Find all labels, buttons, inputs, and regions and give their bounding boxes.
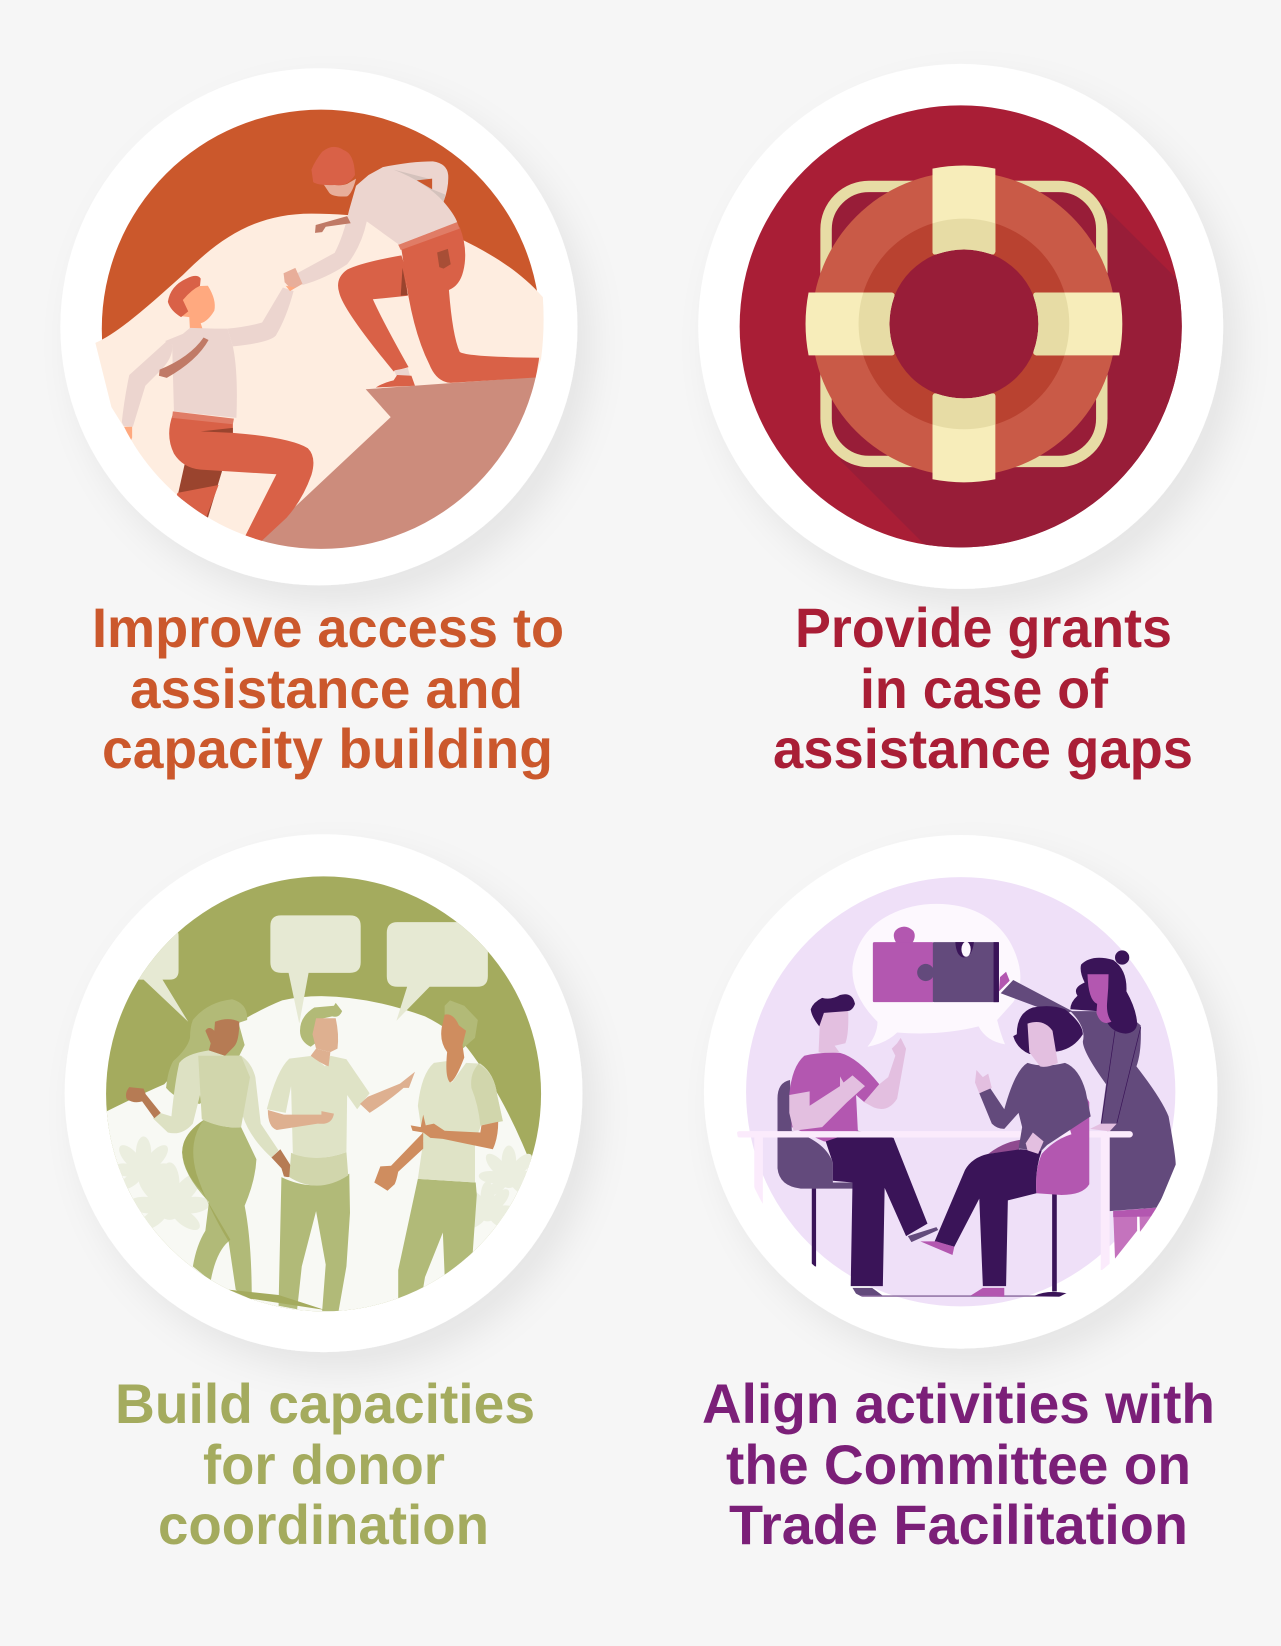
white disc [698, 64, 1223, 589]
heading: align activities: Trade Facilitation [729, 1493, 1188, 1556]
heading: improve access: Improve access to [92, 596, 564, 659]
heading: provide grants: Provide grants [795, 596, 1172, 659]
puzzle magenta piece [873, 942, 934, 1002]
right chair leg [1052, 1193, 1057, 1291]
right chair [1036, 1091, 1089, 1195]
lower man hand [286, 286, 295, 291]
upper man hand [284, 268, 302, 290]
man raised arm [864, 1038, 906, 1109]
lower man hair [168, 276, 201, 317]
hair bun [1115, 950, 1129, 965]
rock [258, 377, 547, 557]
heading: improve access [92, 596, 564, 780]
puzzle notch light [961, 942, 971, 957]
top band [932, 166, 995, 255]
lower man back arm [121, 341, 172, 427]
woman right hand [271, 1149, 295, 1177]
seated woman pants [935, 1149, 1042, 1286]
heading: improve access: assistance and [130, 657, 523, 720]
right man hair [445, 1000, 478, 1050]
speech bubble [852, 904, 1020, 1047]
white disc [704, 835, 1217, 1349]
upper man tie [315, 216, 351, 233]
sleeve line [1101, 1027, 1141, 1124]
upper man shirt [297, 161, 457, 285]
middle man face [312, 1018, 338, 1052]
middle man pointing arm [360, 1072, 415, 1113]
left chair leg [812, 1189, 816, 1266]
standing woman table hand [1090, 1124, 1117, 1131]
left band [806, 292, 895, 355]
bottom band [932, 393, 995, 482]
ground strip [229, 1290, 325, 1310]
legging strip [1113, 1207, 1158, 1217]
lower man rear leg [177, 464, 222, 518]
left speech bubble [138, 932, 188, 1022]
heading: donor coordination: Build capacities [115, 1372, 535, 1435]
lower man torso [165, 328, 237, 418]
right chair base [1035, 1292, 1067, 1297]
orange sky [102, 110, 540, 548]
puzzle edge [994, 942, 999, 1002]
standing woman face [1087, 974, 1111, 1023]
standing woman raised arm [1001, 980, 1072, 1018]
belt [398, 222, 460, 250]
heading: provide grants: in case of [860, 657, 1108, 720]
lower man lower hand [124, 426, 132, 440]
heading: provide grants [773, 596, 1193, 780]
man planted shoe [852, 1288, 883, 1297]
seated woman belly hand [1026, 1132, 1044, 1154]
leaves left [118, 1136, 209, 1230]
table top [736, 1131, 1133, 1137]
heading: donor coordination [115, 1372, 535, 1556]
seated woman top [979, 1063, 1091, 1150]
heading: align activities [702, 1372, 1215, 1556]
heading: align activities: the Committee on [726, 1433, 1191, 1496]
arm gap [417, 179, 432, 189]
trouser shadow [401, 268, 408, 296]
white disc [65, 834, 582, 1352]
upper man face [322, 178, 356, 197]
upper man hair [311, 147, 355, 185]
trouser crease [201, 428, 233, 433]
man trousers [826, 1131, 927, 1286]
middle man shirt [267, 1056, 370, 1158]
standing woman hand [999, 972, 1010, 991]
upper man rear leg [401, 227, 547, 383]
middle man shirt hem [289, 1152, 348, 1186]
right man face [441, 1014, 466, 1082]
middle man hair [300, 1003, 342, 1047]
table right leg [1101, 1137, 1110, 1270]
seated woman planted shoe [970, 1288, 1004, 1297]
heading: improve access: capacity building [102, 717, 553, 780]
lower man raised arm [227, 287, 294, 346]
pocket [437, 249, 451, 269]
long shadow [841, 204, 1187, 557]
panel: provide grants [698, 64, 1223, 589]
heading: provide grants: assistance gaps [773, 717, 1193, 780]
middle man neck [311, 1049, 330, 1066]
puzzle knob top [894, 927, 915, 943]
man face and neck [819, 1011, 848, 1054]
red disc [740, 105, 1182, 547]
scene [100, 915, 550, 1320]
man shirt [789, 1053, 879, 1143]
middle man trousers [279, 1174, 350, 1311]
woman hair [166, 999, 247, 1104]
seated woman face [1027, 1022, 1058, 1067]
upper man trousers [338, 255, 409, 371]
right band [1033, 292, 1122, 355]
heading: align activities: Align activities with [702, 1372, 1215, 1435]
panel: improve access [60, 68, 577, 585]
cream hill [95, 214, 544, 549]
ankle [394, 368, 410, 376]
woman torso [198, 1056, 250, 1127]
man hair [811, 994, 855, 1026]
middle man forearm [268, 1110, 334, 1130]
man raised shoe [908, 1227, 938, 1242]
middle speech bubble [270, 915, 361, 1024]
seated woman raised shoe [920, 1241, 954, 1255]
lower man trousers [169, 414, 313, 541]
panel: donor coordination [65, 834, 582, 1352]
seated woman pointing hand [975, 1070, 992, 1093]
rope [826, 186, 1102, 461]
white disc [60, 68, 577, 585]
right speech bubble [387, 922, 488, 1021]
climbing figures [121, 147, 547, 557]
puzzle purple piece [933, 942, 999, 1002]
right man sleeve [471, 1064, 503, 1125]
figures [736, 950, 1176, 1297]
olive disc [106, 876, 541, 1311]
puzzle notch [955, 942, 974, 957]
standing woman legs [1113, 1210, 1137, 1259]
ring inner shade [859, 219, 1069, 429]
man front arm [789, 1075, 865, 1131]
left chair [777, 1080, 852, 1189]
woman leg shade [182, 1120, 230, 1241]
standing woman hair [1070, 958, 1137, 1034]
shoe [376, 375, 415, 387]
right man lower arm [374, 1132, 423, 1191]
lower man tie [159, 337, 209, 378]
ground line [858, 1295, 1065, 1297]
lifebuoy ring [812, 172, 1116, 476]
lilac disc [746, 877, 1175, 1306]
woman left arm [126, 1087, 161, 1118]
seated woman hair [1013, 1006, 1083, 1054]
woman face [205, 1019, 239, 1056]
right man trousers [398, 1179, 477, 1299]
band shading [858, 218, 1070, 430]
rear leg light part [176, 485, 219, 518]
standing woman dress [1070, 1011, 1176, 1211]
heading: donor coordination: coordination [158, 1493, 489, 1556]
lower man belt [172, 411, 234, 424]
right man shirt [418, 1061, 503, 1182]
puzzle knob side [917, 964, 934, 981]
woman legs [182, 1120, 256, 1300]
second leg [1139, 1209, 1158, 1232]
lap patch [988, 1140, 1022, 1154]
ring hole [889, 249, 1039, 399]
heading: donor coordination: for donor [203, 1433, 445, 1496]
leaves right [474, 1146, 532, 1228]
shirt shadow [394, 170, 445, 202]
pale hill [100, 996, 550, 1320]
right man upper arm [411, 1115, 498, 1149]
table left leg [754, 1137, 763, 1204]
woman top [153, 1050, 279, 1157]
panel: align activities [704, 835, 1217, 1349]
lower man neck and face [182, 286, 215, 328]
